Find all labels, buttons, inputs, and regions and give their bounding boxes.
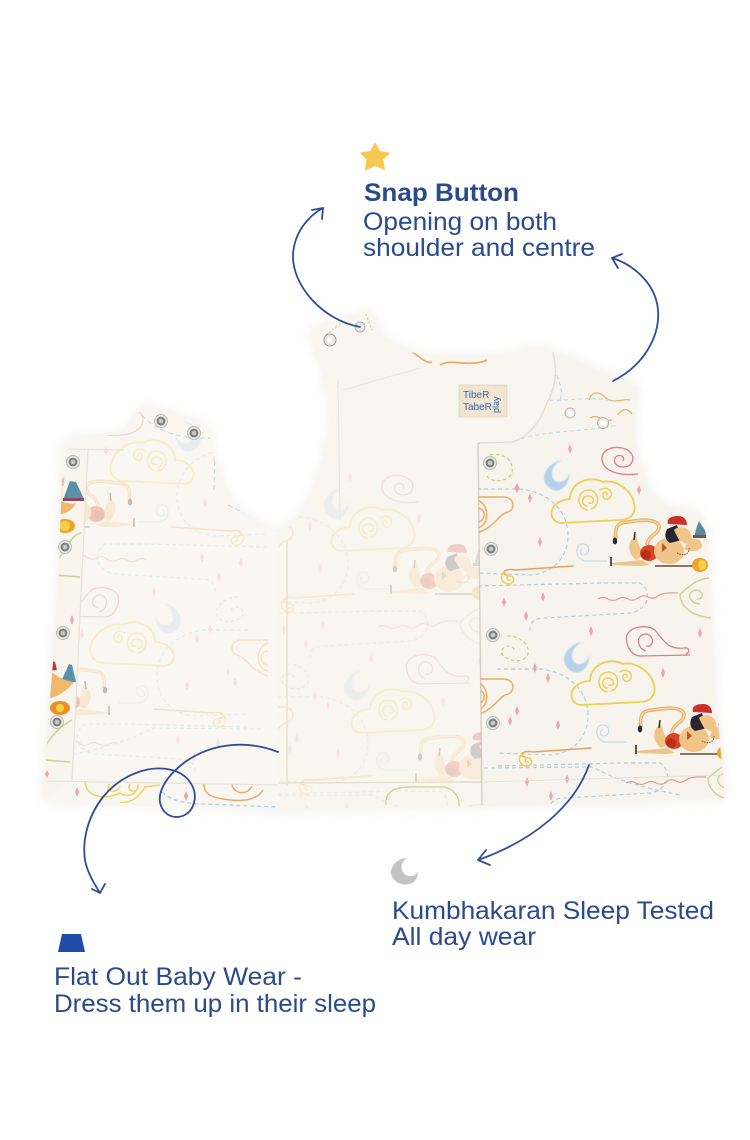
panel: centre back [278,314,488,808]
neck trim dashes [515,372,620,442]
garment: flat-laid baby vest photo [41,310,726,812]
snaps: left panel [50,414,200,728]
print: bottom dashed line [162,792,277,807]
snap: back shoulder lower [324,334,336,346]
armhole trim stitching [142,414,244,514]
arrow: looped, to flat out baby wear [84,745,278,893]
arrow: to snap button from right shoulder [612,254,658,381]
back seam [338,368,420,520]
icon: moon [391,858,418,885]
placket edge [43,449,278,785]
print fragment: hat triangle [60,481,84,514]
description: Dress them up in their sleep [54,990,376,1018]
garment soft shadow [43,311,725,809]
callout: snap button [361,143,595,262]
print: bottom yellow curls [85,781,160,803]
hem line [278,782,480,783]
brand label: play [491,396,501,413]
arrow: to snap button from back shoulder [293,208,360,327]
neckline print band [412,352,487,365]
snaps: right panel placket [484,456,500,730]
arrow: to kumbhakaran sleep tested [478,765,589,865]
right panel edge shadow [478,443,482,805]
print: bottom orange curl [204,784,263,801]
print fragment: green cloud [55,533,81,577]
brand label: TabeR [463,402,492,413]
description: Opening on both [363,208,557,236]
description: Flat Out Baby Wear - [54,963,302,991]
placket strip [48,477,86,756]
icon: star [361,143,390,170]
bottom green print [386,787,459,806]
faded show-through print [278,472,482,808]
brand label [459,385,507,417]
print fragment: lower green cloud [44,720,72,762]
print fragment: mace [60,519,75,533]
shoulder print [589,393,632,420]
shoulder trim print [326,314,372,335]
description [392,897,714,951]
garment silhouette [43,311,725,809]
icon: trapezoid [58,934,85,952]
print: bottom diamonds [45,615,188,801]
callout: flat out baby wear [54,934,376,1018]
hem line [484,775,722,782]
heading: Snap Button [364,179,519,207]
brand label: TibeR [463,390,489,401]
description [54,963,376,1018]
print fragment: lower figure [49,660,76,698]
infographic canvas [41,142,726,1017]
description: Kumbhakaran Sleep Tested [392,897,714,925]
faded mirrored print [49,412,268,771]
print fragment: lower mace [50,701,70,715]
description: shoulder and centre [363,234,595,262]
panel: left front [44,412,278,808]
description [363,208,595,262]
snaps: right shoulder [565,408,608,428]
snap: back shoulder [355,322,365,332]
panel: right front [478,372,725,804]
main print [477,444,740,810]
callout: kumbhakaran sleep tested [391,858,714,951]
centre placket [286,540,288,786]
description: All day wear [392,923,536,951]
neck shadow [478,352,555,443]
